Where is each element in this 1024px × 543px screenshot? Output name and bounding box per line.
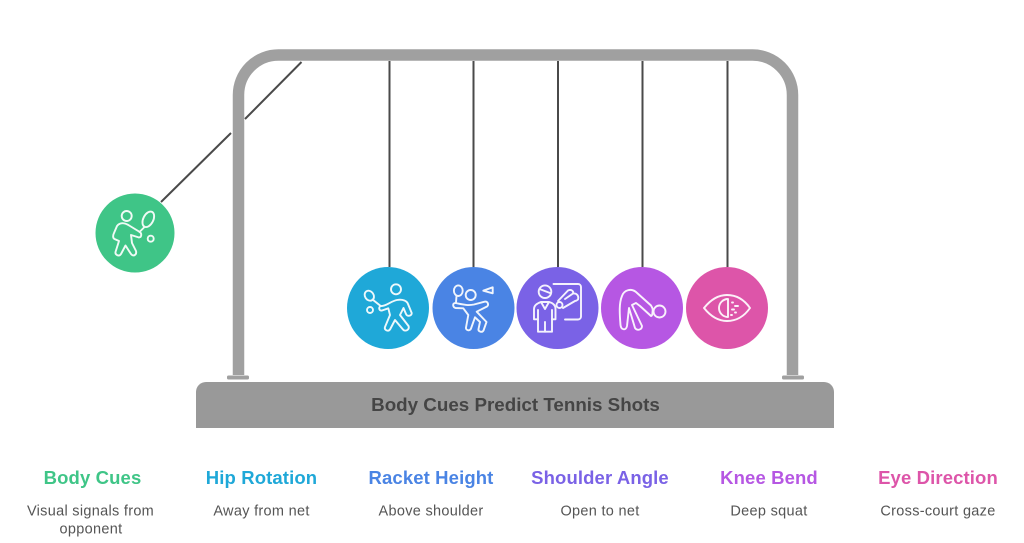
column: knee bend: Knee Bend — [720, 467, 818, 488]
ball: eye direction icon — [686, 267, 768, 349]
column: eye direction — [878, 467, 998, 520]
cradle frame — [227, 55, 804, 380]
column: hip rotation — [206, 467, 317, 520]
column: shoulder angle: Open to net — [560, 504, 640, 520]
column: racket height: Above shoulder — [379, 504, 483, 520]
base with title: Body Cues Predict Tennis Shots — [371, 394, 660, 415]
ball: racket height icon — [432, 267, 514, 349]
column: body cues: Visual signals from — [27, 504, 154, 520]
column: shoulder angle — [531, 467, 669, 520]
base with title — [196, 382, 834, 428]
ball: body cues player icon — [96, 194, 174, 272]
column: racket height: Racket Height — [369, 467, 493, 488]
column: eye direction: Cross-court gaze — [880, 504, 996, 520]
column: knee bend: Deep squat — [730, 504, 808, 520]
column: body cues: opponent — [60, 522, 122, 538]
ball: knee bend icon — [601, 267, 683, 349]
ball: shoulder angle coach icon — [516, 267, 598, 349]
column: body cues: Body Cues — [44, 467, 141, 488]
column: hip rotation: Away from net — [213, 504, 310, 520]
column: racket height — [369, 467, 493, 520]
column: eye direction: Eye Direction — [878, 467, 998, 488]
column: shoulder angle: Shoulder Angle — [531, 467, 669, 488]
column: body cues — [27, 467, 154, 538]
ball: hip rotation icon — [347, 267, 429, 349]
pendulum strings — [161, 61, 728, 267]
column: knee bend — [720, 467, 818, 520]
column: hip rotation: Hip Rotation — [206, 467, 317, 488]
